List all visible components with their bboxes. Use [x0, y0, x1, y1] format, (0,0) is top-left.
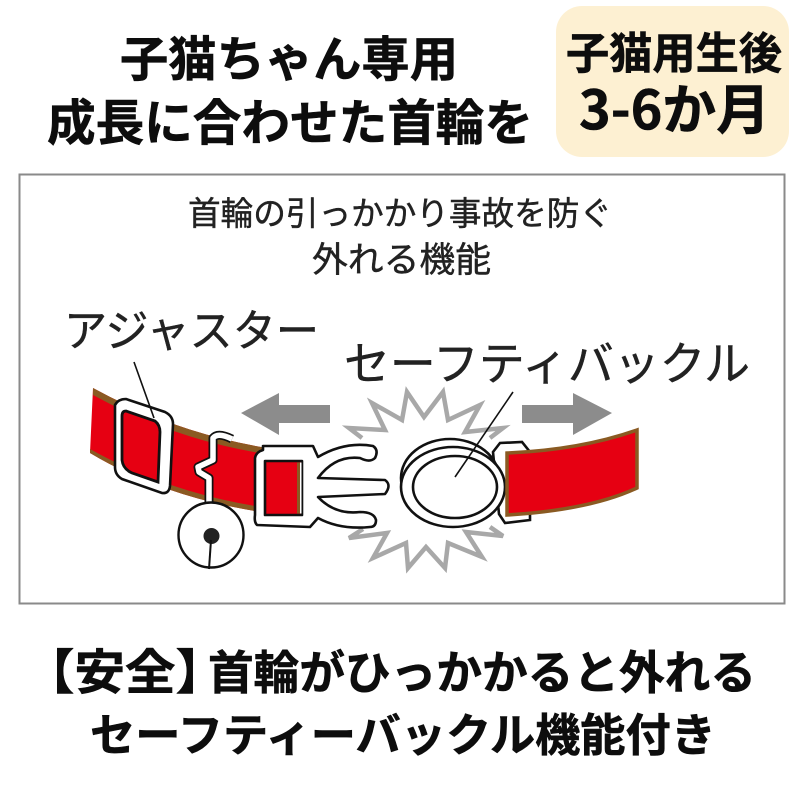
badge: age range: 3-6か月 — [579, 66, 770, 145]
arrow left — [241, 393, 330, 435]
bottom caption — [24, 633, 756, 764]
buckle male part — [255, 445, 388, 528]
buckle female part — [401, 439, 530, 527]
badge: age range — [556, 6, 789, 157]
bottom caption: 首輪がひっかかると外れる — [208, 637, 756, 703]
label: safety buckle: セーフティバックル — [344, 328, 750, 394]
panel: safety buckle diagram — [20, 174, 784, 604]
panel heading — [188, 187, 612, 283]
leader line: safety buckle — [455, 392, 513, 477]
arrow right — [522, 393, 612, 435]
adjuster slider — [115, 399, 173, 493]
title: 成長に合わせた首輪を — [47, 84, 533, 155]
label: adjuster: アジャスター — [64, 295, 319, 359]
badge: age range: 子猫用生後 — [566, 19, 782, 82]
title — [47, 20, 533, 155]
bottom caption: セーフティーバックル機能付き — [90, 699, 716, 764]
right collar strap — [507, 430, 637, 515]
title: 子猫ちゃん専用 — [120, 20, 458, 90]
bottom caption: 【安全】 — [24, 633, 226, 703]
left collar strap — [90, 388, 267, 511]
panel heading: 外れる機能 — [312, 232, 491, 283]
bell charm — [178, 435, 244, 569]
panel heading: 首輪の引っかかり事故を防ぐ — [188, 187, 612, 235]
burst outline — [349, 392, 503, 568]
leader line: adjuster — [134, 362, 154, 418]
